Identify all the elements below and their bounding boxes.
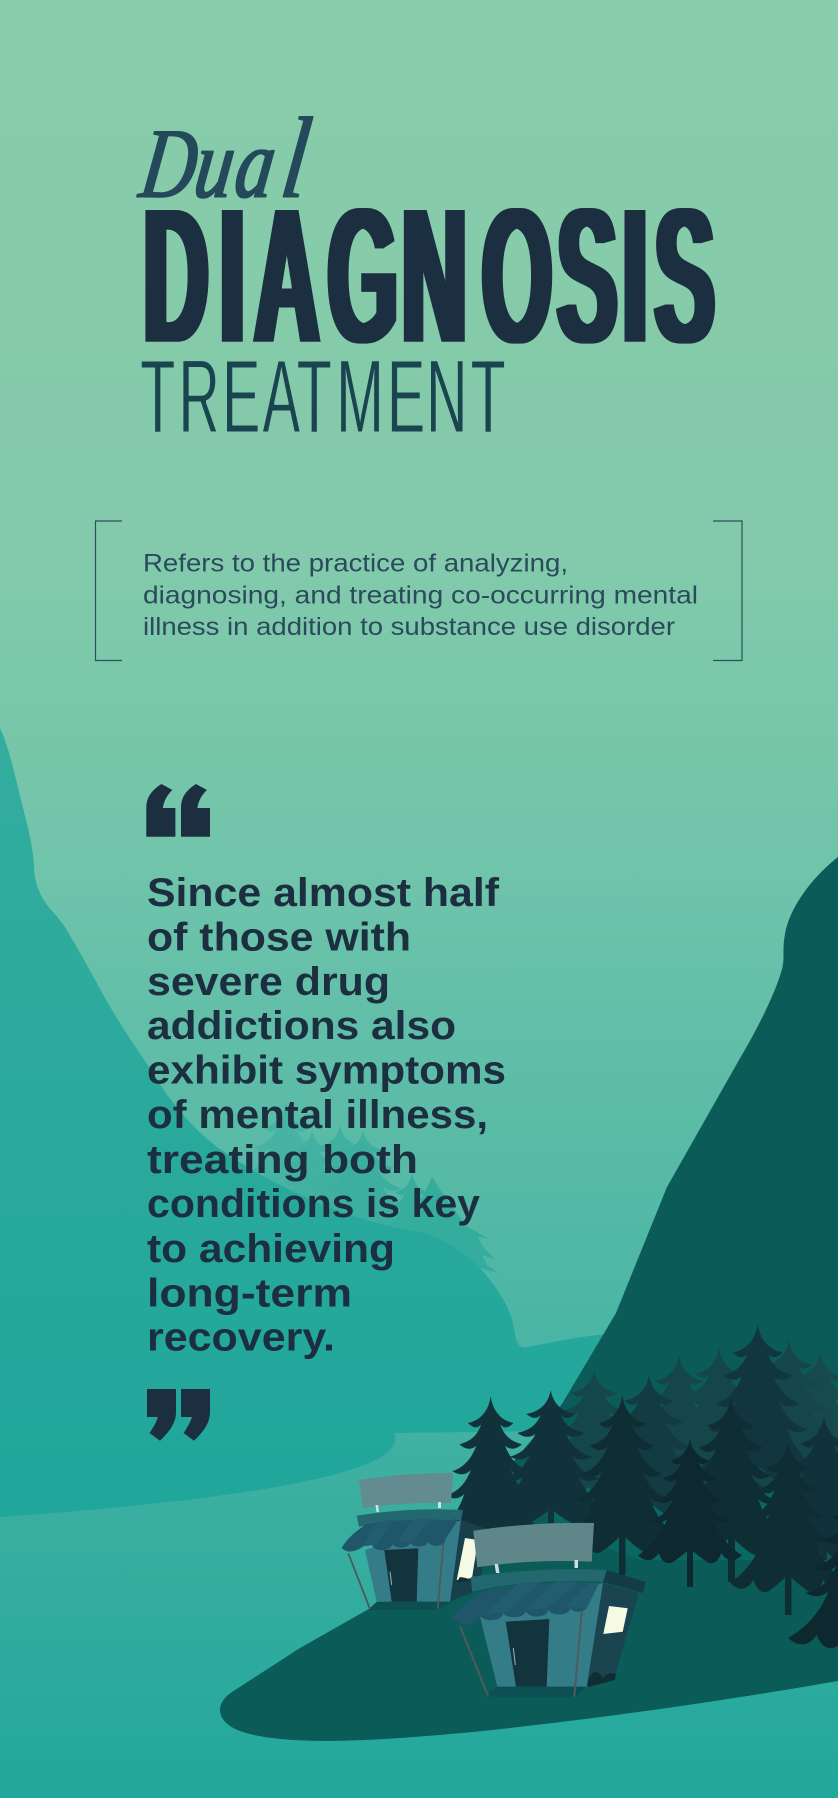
front shop door <box>506 1619 549 1687</box>
definition text: diagnosing, and treating co-occurring mental <box>143 581 698 609</box>
back shop body <box>365 1520 461 1602</box>
back shop side wall <box>449 1520 490 1602</box>
forest <box>431 1324 838 1648</box>
definition text <box>143 550 698 641</box>
back row of trees <box>534 1324 838 1519</box>
back shop <box>342 1473 490 1610</box>
back shop shrub <box>457 1577 471 1582</box>
quote text: long-term <box>147 1272 352 1316</box>
front shop side band <box>603 1570 646 1593</box>
front shop body <box>480 1583 603 1687</box>
right bracket <box>713 521 742 660</box>
middle row of trees <box>431 1390 838 1568</box>
title: Dual: u <box>189 109 242 219</box>
back shop base <box>368 1602 450 1610</box>
quote text: to achieving <box>147 1227 395 1271</box>
quote text: severe drug <box>147 960 390 1004</box>
quote text: treating both <box>147 1138 418 1182</box>
front shop base <box>485 1687 587 1697</box>
front shop side wall <box>587 1583 639 1687</box>
left bracket <box>96 521 122 660</box>
definition text: Refers to the practice of analyzing, <box>143 550 568 578</box>
front row of trees <box>560 1395 838 1648</box>
front shop window <box>603 1606 628 1634</box>
title: TREATMENT: TREATMENT <box>141 338 505 455</box>
quote text <box>147 871 506 1360</box>
definition text: illness in addition to substance use disorder <box>143 613 675 641</box>
dark mountain and foreground hill <box>220 857 838 1741</box>
back shop roof band <box>357 1509 463 1527</box>
front shop poles <box>460 1612 582 1697</box>
title: DIAGNOSIS: DIAGNOSIS <box>143 168 715 385</box>
lighter glow behind trees <box>530 1400 838 1560</box>
opening quotation mark <box>146 784 210 837</box>
left mountain <box>0 728 620 1517</box>
closing quotation mark <box>147 1389 210 1441</box>
title <box>134 95 715 455</box>
front shop door handle <box>513 1648 515 1665</box>
back shop door <box>384 1548 418 1602</box>
quote text: exhibit symptoms <box>147 1048 506 1092</box>
quote text: recovery. <box>147 1316 335 1360</box>
front shop sign posts <box>494 1560 578 1573</box>
back shop sign posts <box>376 1502 441 1512</box>
back shop poles <box>348 1543 443 1609</box>
quote text: conditions is key <box>147 1182 481 1226</box>
title: Dual: D <box>134 109 204 219</box>
back shop awning <box>342 1519 458 1552</box>
shrub <box>588 1672 616 1687</box>
front shop awning <box>452 1581 599 1625</box>
faint treeline on left mountain <box>224 1103 498 1290</box>
title: Dual: l <box>275 95 318 223</box>
quote text: addictions also <box>147 1004 456 1048</box>
quote text: Since almost half <box>147 871 500 915</box>
definition box <box>96 521 742 660</box>
quote text: of those with <box>147 916 411 960</box>
front shop roof band <box>471 1569 607 1592</box>
quote text: of mental illness, <box>147 1093 488 1137</box>
front shop <box>452 1523 646 1697</box>
back shop sign <box>359 1473 453 1508</box>
title: Dual <box>134 95 318 223</box>
title: Dual: a <box>229 109 282 219</box>
back shop door handle <box>390 1572 392 1585</box>
front shop sign <box>473 1523 594 1567</box>
pull quote <box>146 784 506 1441</box>
back shop window <box>457 1538 478 1580</box>
